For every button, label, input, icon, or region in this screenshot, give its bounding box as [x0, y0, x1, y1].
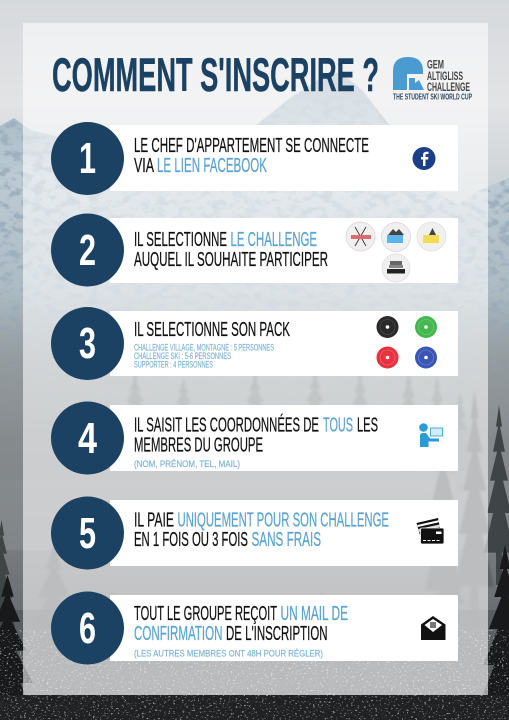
- step 6: CONFIRMATION: [134, 622, 222, 645]
- icon: person with card: [419, 423, 442, 447]
- step 3: SUPPORTER : 4 PERSONNES: [134, 360, 213, 370]
- step 3: 3: [79, 319, 96, 368]
- icon: challenge village badge: [382, 222, 410, 252]
- icon: black pack: [376, 316, 398, 338]
- step 6: UN MAIL DE: [280, 602, 348, 625]
- step 5: [51, 496, 458, 570]
- step 1: [51, 122, 458, 195]
- icon: credit cards: [416, 518, 444, 544]
- step 2: 2: [79, 226, 96, 275]
- step 1: LE LIEN FACEBOOK: [157, 154, 267, 177]
- icon: blue pack: [415, 346, 437, 368]
- step 2: LE CHALLENGE: [230, 228, 317, 251]
- step 4: (NOM, PRÉNOM, TEL, MAIL): [134, 459, 240, 469]
- step 4: MEMBRES DU GROUPE: [134, 434, 263, 456]
- icon: challenge ski badge: [346, 222, 375, 251]
- icon: supporter badge: [382, 254, 410, 282]
- logo: GEM Altigliss Challenge: GEM: [427, 58, 444, 72]
- logo: GEM Altigliss Challenge: [393, 57, 472, 102]
- logo: GEM Altigliss Challenge: CHALLENGE: [427, 80, 470, 94]
- step 3: CHALLENGE SKI : 5-6 PERSONNES: [134, 351, 231, 361]
- step 1: 1: [79, 134, 96, 183]
- step 2: IL SELECTIONNE: [134, 228, 227, 251]
- step 4: [51, 402, 458, 474]
- step 5: 5: [79, 509, 96, 558]
- icon: green pack: [415, 316, 437, 338]
- step 6: 6: [79, 604, 96, 653]
- step 2: AUQUEL IL SOUHAITE PARTICIPER: [134, 248, 328, 271]
- step 6: DE L'INSCRIPTION: [226, 622, 328, 645]
- icon: open envelope: [421, 616, 446, 640]
- step 5: SANS FRAIS: [252, 528, 321, 551]
- step 4: TOUS: [323, 414, 353, 436]
- icon: red pack: [376, 346, 398, 368]
- step 4: LES: [357, 414, 378, 436]
- step 4: IL SAISIT LES COORDONNÉES DE: [134, 414, 319, 436]
- step 1: VIA: [134, 154, 154, 177]
- step 5: EN 1 FOIS OU 3 FOIS: [134, 528, 248, 551]
- step 2: [51, 214, 458, 286]
- step 6: [51, 592, 458, 664]
- step 3: IL SELECTIONNE SON PACK: [134, 318, 290, 341]
- icon: facebook: [412, 147, 436, 170]
- step 5: IL PAIE: [134, 508, 174, 532]
- icon: challenge montagne badge: [417, 222, 446, 251]
- step 4: 4: [78, 414, 97, 463]
- step 3: [51, 307, 458, 380]
- step 6: TOUT LE GROUPE REÇOIT: [134, 602, 277, 625]
- step 3: CHALLENGE VILLAGE, MONTAGNE : 5 PERSONNES: [134, 342, 274, 352]
- step 6: (LES AUTRES MEMBRES ONT 48H POUR RÉGLER): [134, 648, 323, 658]
- logo: GEM Altigliss Challenge: ALTIGLISS: [427, 69, 463, 83]
